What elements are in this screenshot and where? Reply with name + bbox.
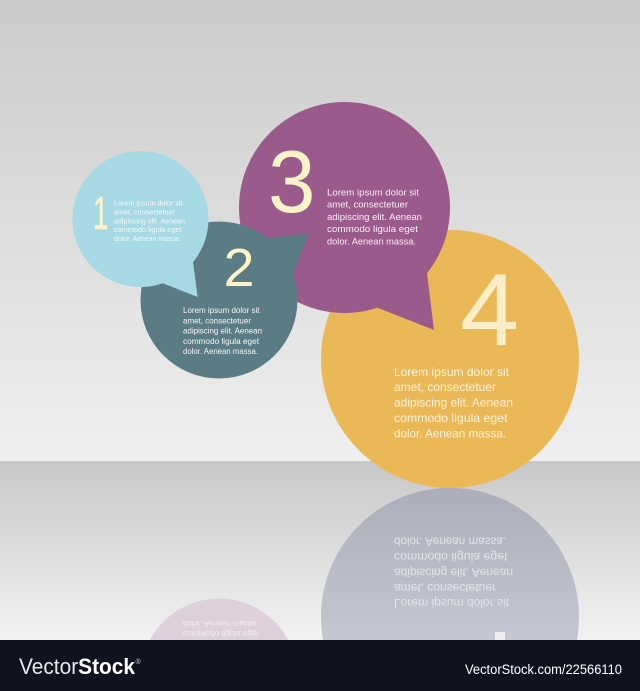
reflection of bubble 2: dolor. Aenean massa. [183,619,258,628]
tail of bubble 2 [250,233,309,273]
text 1: adipiscing elit. Aenean [114,218,185,226]
text 4: amet, consectetuer [394,380,496,394]
number 4: 4 [460,253,519,367]
tail of bubble 3 [360,260,434,330]
reflection of bubble 4: Lorem ipsum dolor sit [394,596,510,610]
bubble 3: purple [239,102,450,330]
reflection of bubble 4: adipiscing elit. Aenean [394,566,513,580]
reflection of bubble 2 [150,599,288,640]
text 3: commodo ligula eget [327,224,418,235]
number 2: 2 [224,238,254,298]
text 3 [327,188,422,248]
text 2 [183,306,262,356]
text 1: dolor. Aenean massa. [114,236,181,243]
reflection of bubble 4: commodo ligula eget [394,550,508,564]
reflection of bubble 4 [321,488,579,640]
text 4: adipiscing elit. Aenean [394,396,513,410]
text 1: amet, consectetuer [114,210,176,216]
registered mark: ® [136,658,142,666]
text 4: commodo ligula eget [394,411,508,425]
tail of bubble 1 [150,260,198,297]
text 2: Lorem ipsum dolor sit [183,306,260,315]
text 3: amet, consectetuer [327,200,408,210]
text 4 [394,365,513,440]
text 2: commodo ligula eget [183,337,260,346]
text 3: adipiscing elit. Aenean [327,212,422,223]
footer bar [0,640,640,691]
footer image id: VectorStock.com/22566110 [465,662,622,677]
text 2: amet, consectetuer [183,316,251,325]
text 4: dolor. Aenean massa. [394,426,506,440]
text 1: commodo ligula eget [114,227,182,234]
text 3: dolor. Aenean massa. [327,236,416,248]
background wall [0,0,640,461]
reflected digit stem [495,632,505,640]
text 1 [114,200,185,243]
reflection of bubble 2: commodo ligula eget [183,629,260,638]
footer logo: VectorStock [19,654,135,679]
reflection of bubble 4: amet, consectetuer [394,581,496,595]
text 2: dolor. Aenean massa. [183,347,258,356]
text 1: Lorem ipsum dolor sit [114,200,183,208]
bubble 1: light blue [72,151,208,297]
text 4: Lorem ipsum dolor sit [394,365,510,379]
bubble 4: yellow [321,230,579,488]
text 2: adipiscing elit. Aenean [183,326,262,336]
text 3: Lorem ipsum dolor sit [327,188,419,198]
number 3: 3 [268,132,316,231]
bubble 2: teal [140,222,309,378]
number 1: 1 [93,187,108,239]
reflection of bubble 4: dolor. Aenean massa. [394,534,506,548]
floor [0,461,640,640]
